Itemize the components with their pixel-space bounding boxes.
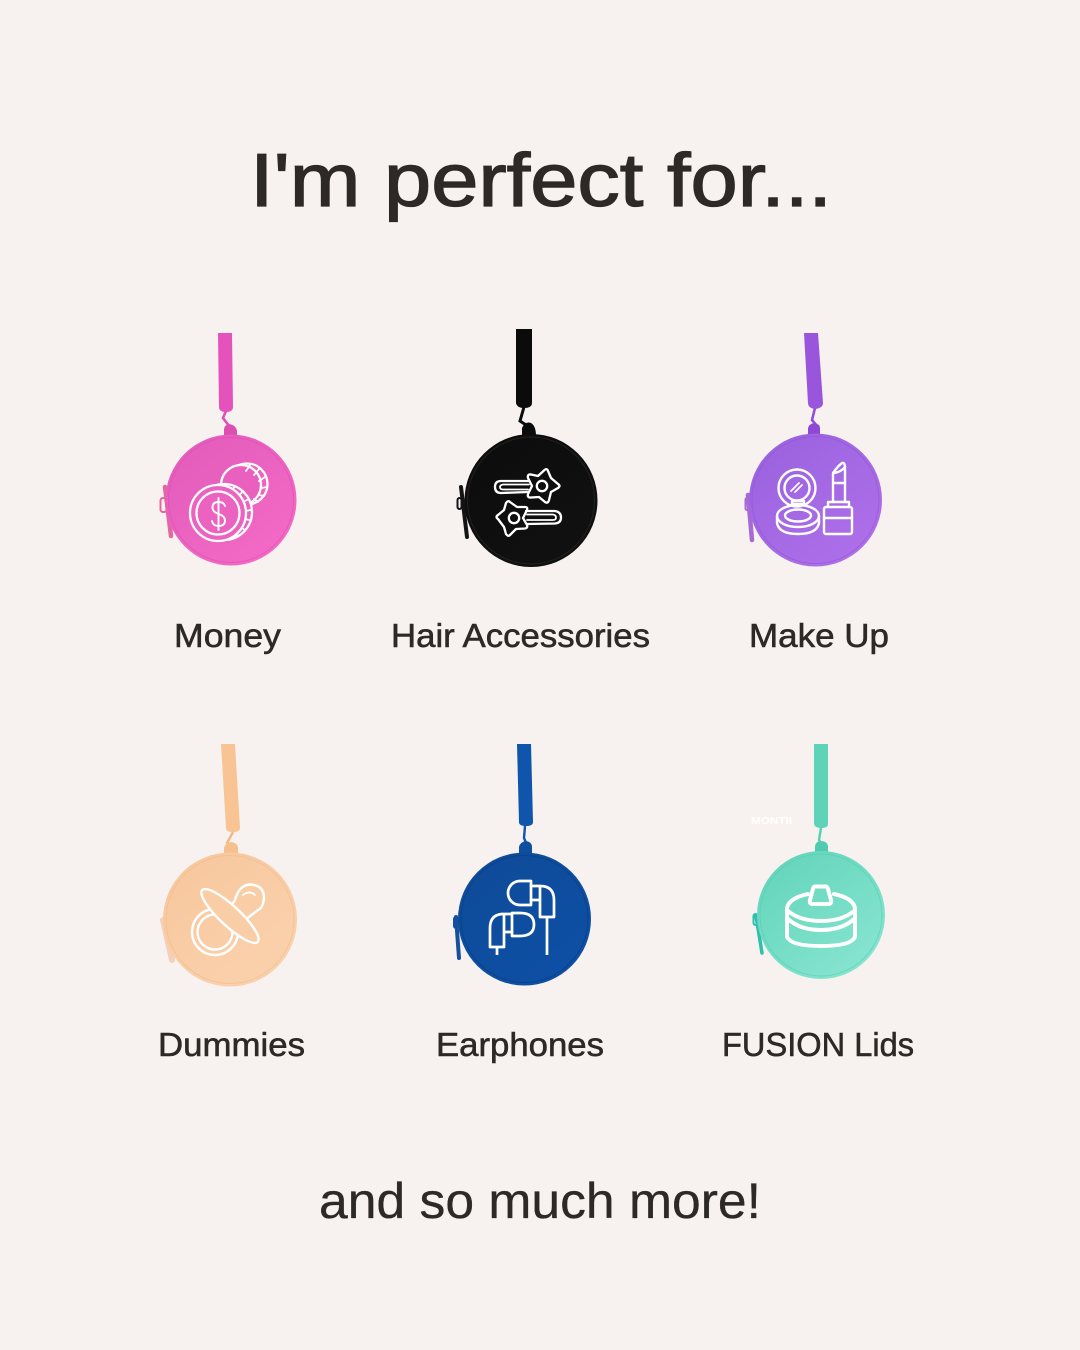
pouch rim — [468, 437, 594, 564]
clasp link — [520, 407, 529, 431]
panel: fusion lids — [722, 744, 914, 1063]
clasp tab — [808, 423, 820, 436]
pouch rim — [760, 854, 882, 976]
panel: money — [160, 333, 296, 654]
panel: hair accessories — [391, 329, 650, 654]
closing line: and so much more! — [319, 1173, 761, 1229]
clasp link — [812, 408, 818, 431]
zipper pull — [454, 917, 459, 958]
label: Make Up — [749, 617, 889, 654]
clasp tab — [522, 423, 536, 436]
title: I'm perfect for... — [250, 138, 832, 222]
pouch body — [166, 434, 296, 566]
brand mark: MONTII — [751, 815, 792, 827]
pouch body — [458, 852, 591, 986]
strap — [517, 744, 533, 826]
zipper pull — [163, 920, 172, 960]
icon: coins — [190, 464, 268, 541]
clasp tab — [519, 841, 532, 855]
pouch rim — [166, 856, 294, 984]
icon: compact and lipstick — [777, 463, 852, 534]
pouch rim — [461, 856, 588, 982]
icon: pacifier — [192, 883, 265, 955]
pouch body — [464, 434, 598, 567]
zipper pull — [160, 487, 171, 536]
icon: earphones — [490, 881, 554, 955]
zipper pull — [458, 487, 467, 537]
panel: dummies — [158, 744, 305, 1063]
strap — [221, 744, 240, 832]
pouch body — [163, 852, 297, 986]
label: Earphones — [436, 1026, 604, 1063]
pouch rim — [752, 436, 879, 564]
label: FUSION Lids — [722, 1026, 914, 1063]
clasp tab — [224, 842, 238, 854]
pouch rim — [168, 438, 294, 562]
icon: lid — [787, 886, 855, 946]
icon: hair clips — [495, 469, 561, 536]
clasp tab — [224, 424, 237, 438]
label: Dummies — [158, 1026, 305, 1063]
strap — [814, 744, 828, 828]
label: Money — [174, 617, 282, 654]
zipper pull — [754, 914, 762, 953]
pouch body — [757, 851, 885, 979]
label: Hair Accessories — [391, 617, 650, 654]
panel: make up — [746, 333, 889, 654]
clasp link — [819, 828, 822, 845]
strap — [218, 333, 233, 412]
clasp link — [223, 411, 230, 431]
pouch body — [749, 434, 882, 566]
clasp tab — [815, 841, 828, 853]
clasp link — [524, 826, 527, 845]
strap — [516, 329, 532, 408]
panel: earphones — [436, 744, 604, 1063]
strap — [804, 333, 823, 409]
zipper pull — [746, 495, 752, 540]
clasp link — [227, 832, 233, 849]
